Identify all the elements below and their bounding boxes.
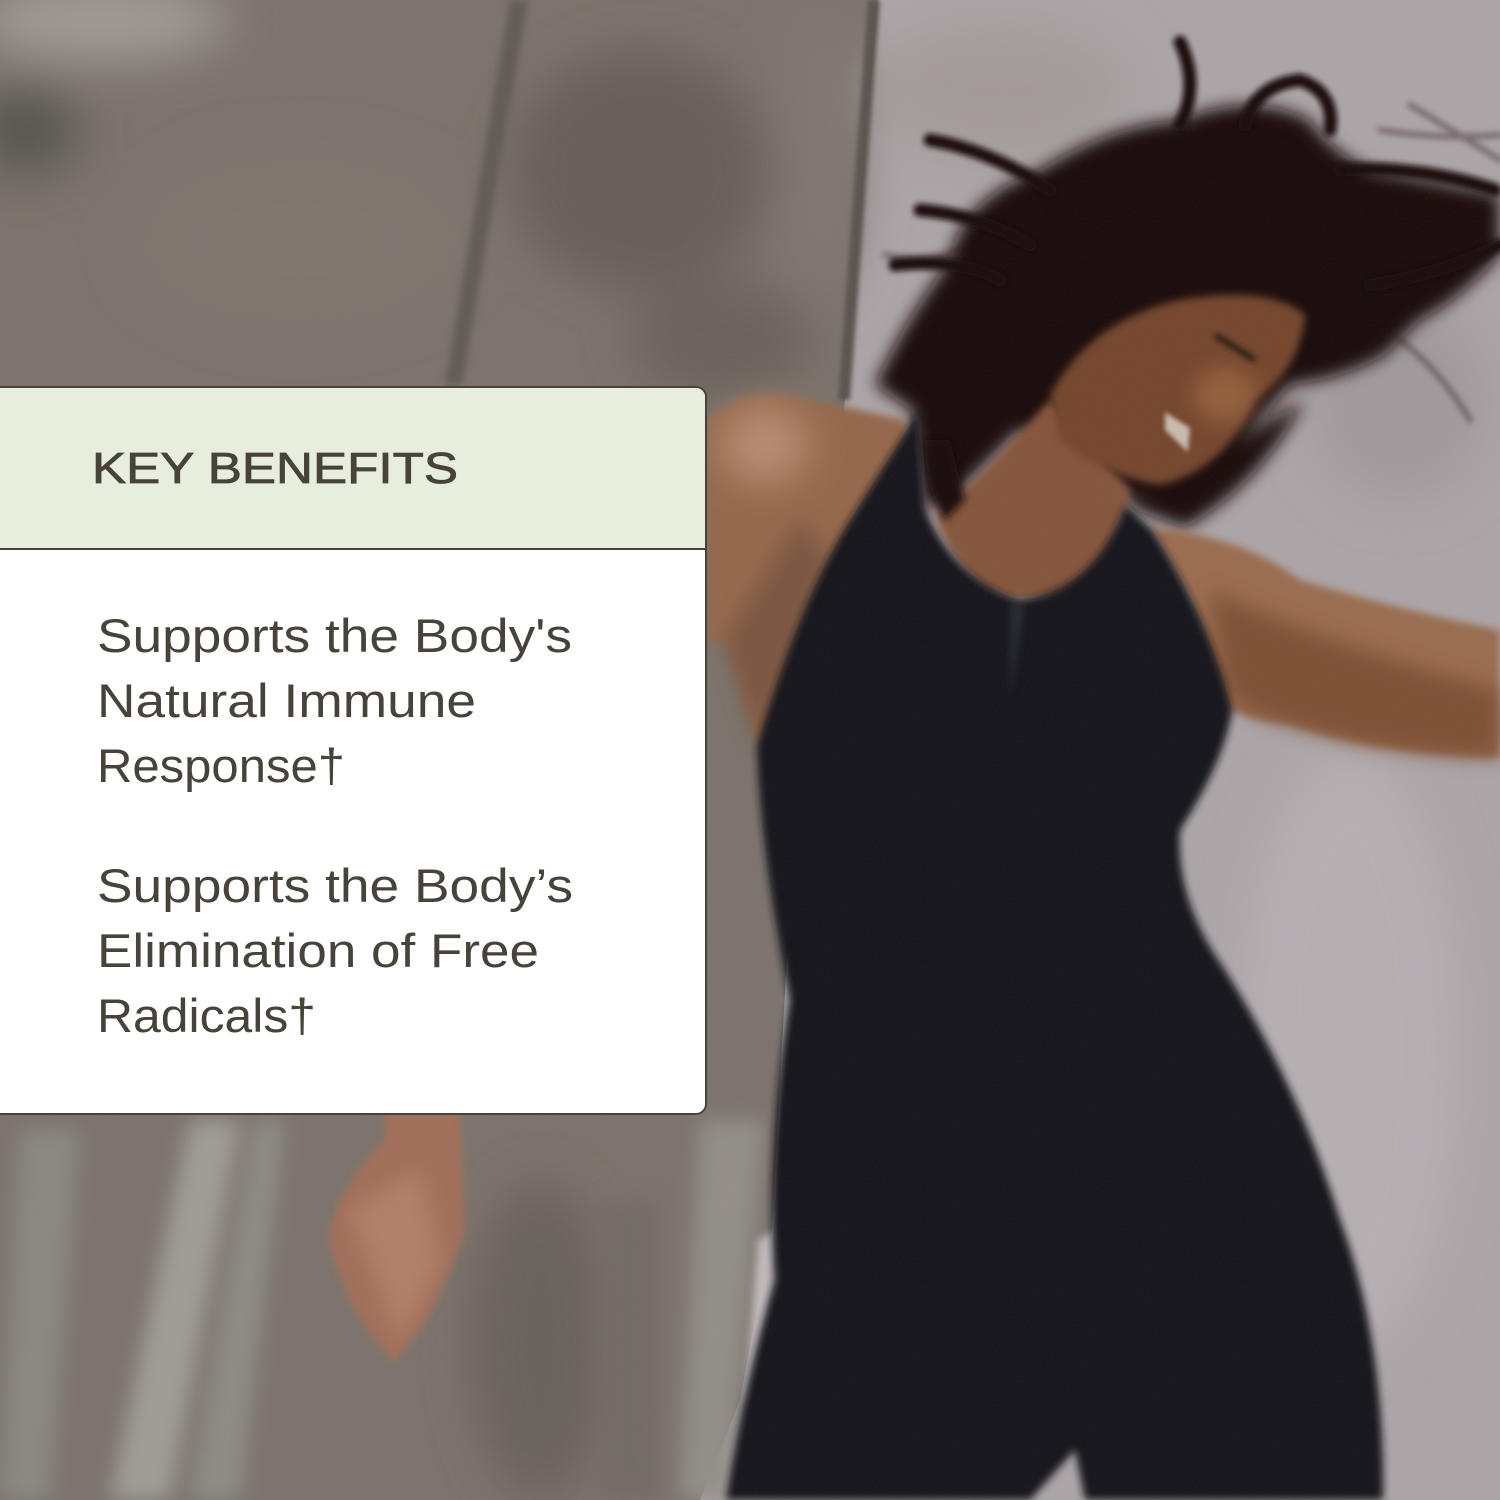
benefit: immune response [97,609,572,792]
panel header band [0,388,705,548]
benefit: free radicals [97,859,573,1042]
benefit: immune response: Natural Immune [97,674,476,727]
benefit: free radicals: Radicals† [97,989,316,1042]
hair mass [875,105,1500,528]
panel: key benefits [0,387,706,1114]
lower arm and hand [328,1112,465,1362]
benefit: free radicals: Elimination of Free [97,924,539,977]
benefit: free radicals: Supports the Body’s [97,859,573,912]
neck and chest [935,400,1130,599]
benefit: immune response: Supports the Body's [97,609,572,662]
hair wisps [885,42,1500,420]
face [1050,295,1305,485]
woman: arms, torso and hair [328,42,1500,1500]
benefit: immune response: Response† [97,739,345,792]
panel body [0,387,706,1114]
lock over chest [925,440,965,520]
dress [726,412,1383,1500]
heading: KEY BENEFITS [92,444,458,493]
outstretched arm [1150,528,1500,758]
back shoulder and arm [706,394,930,760]
